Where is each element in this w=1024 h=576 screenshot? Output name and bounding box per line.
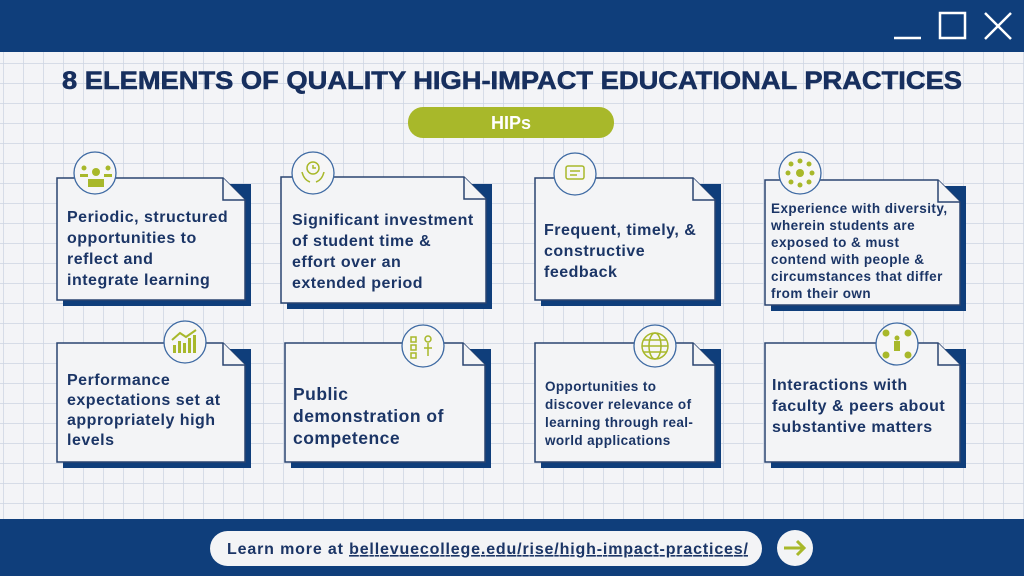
card 2: extended period xyxy=(292,275,423,292)
card 4: wherein students are xyxy=(770,218,915,233)
card 2 xyxy=(281,152,492,309)
window controls xyxy=(894,13,1011,39)
card 1 xyxy=(57,152,251,306)
card 2: effort over an xyxy=(292,254,401,271)
card 3: constructive xyxy=(544,243,645,260)
card 8: Interactions with xyxy=(772,377,908,394)
card 4: circumstances that differ xyxy=(771,269,943,284)
card 1: integrate learning xyxy=(67,272,210,289)
card 5: levels xyxy=(67,432,114,449)
card 7: discover relevance of xyxy=(545,397,692,412)
card 1: reflect and xyxy=(67,251,153,268)
card 5: expectations set at xyxy=(67,392,221,409)
card 4: from their own xyxy=(771,286,871,301)
card 7: world applications xyxy=(544,433,671,448)
card 6: Public xyxy=(293,384,349,404)
card 8: faculty & peers about xyxy=(772,398,945,415)
card 4: exposed to & must xyxy=(771,235,899,250)
title: 8 ELEMENTS OF QUALITY HIGH-IMPACT EDUCATIONAL PRACTICES xyxy=(62,67,962,95)
link pill: Learn more at bellevuecollege.edu/rise/high-impact-practices/ xyxy=(227,541,749,558)
badge: HIPs: HIPs xyxy=(491,113,531,133)
badge: HIPs xyxy=(408,107,614,138)
bottom bar xyxy=(0,519,1024,576)
link pill xyxy=(210,531,762,566)
card 6: demonstration of xyxy=(293,406,444,426)
card 4 xyxy=(765,152,966,311)
card 8 xyxy=(765,323,966,468)
card 7: Opportunities to xyxy=(545,379,656,394)
card 1: opportunities to xyxy=(67,230,197,247)
card 8: substantive matters xyxy=(772,419,933,436)
card 4: Experience with diversity, xyxy=(771,201,948,216)
card 2: Significant investment xyxy=(292,212,474,229)
card 6: competence xyxy=(293,428,400,448)
top bar xyxy=(0,0,1024,52)
card 5: appropriately high xyxy=(67,412,216,429)
card 3 xyxy=(535,153,721,306)
card 7 xyxy=(535,325,721,468)
card 3: feedback xyxy=(544,264,617,281)
card 4: contend with people & xyxy=(771,252,924,267)
card 2: of student time & xyxy=(292,233,431,250)
card 1: Periodic, structured xyxy=(67,209,228,226)
card 5: Performance xyxy=(67,372,170,389)
card 5 xyxy=(57,321,251,468)
arrow button xyxy=(777,530,813,566)
card 7: learning through real- xyxy=(545,415,693,430)
card 6 xyxy=(285,325,491,468)
card 3: Frequent, timely, & xyxy=(544,222,696,239)
